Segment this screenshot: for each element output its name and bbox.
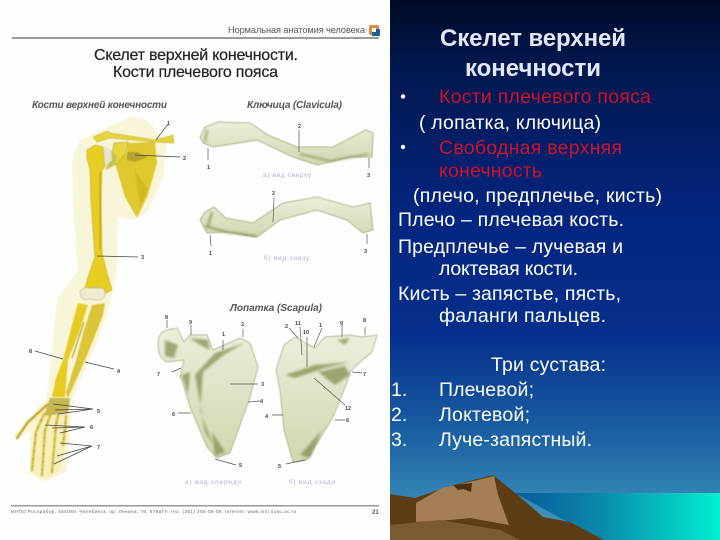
illustration: arm skeleton: 5 <box>97 409 100 415</box>
text: three joints <box>391 354 606 451</box>
illustration: clavicle, top view: 2 <box>298 124 301 130</box>
illustration: scapula, back view: 2 <box>285 324 288 330</box>
text: three joints: Луче-запястный. <box>439 429 592 451</box>
text: bone definitions: Плечо – плечевая кость. <box>398 209 624 231</box>
illustration: clavicle, bottom view: 1 <box>209 251 212 257</box>
list: limb parts: конечность <box>439 160 542 182</box>
illustration: arm skeleton: 7 <box>97 445 100 451</box>
text: bone definitions: локтевая кости. <box>439 258 578 280</box>
text: three joints: Три сустава: <box>491 354 606 376</box>
elbow joint <box>80 288 105 300</box>
page footer <box>11 505 379 516</box>
text: three joints: 3. <box>391 429 407 451</box>
illustration: scapula, back view: 8 <box>363 318 366 324</box>
illustration: clavicle, top view: 1 <box>207 165 210 171</box>
list: limb parts: Кости плечевого пояса <box>439 86 651 108</box>
illustration: scapula, back view: 10 <box>303 330 309 336</box>
list: limb parts: ( лопатка, ключица) <box>419 112 601 134</box>
caption: front view: а) вид спереди <box>185 479 241 486</box>
illustration: scapula, front view: 3 <box>261 382 264 388</box>
slide title: Скелет верхней <box>440 25 626 52</box>
atlas title <box>94 47 298 81</box>
list: limb parts <box>401 86 662 207</box>
illustration: scapula, back view: 7 <box>363 372 366 378</box>
illustration: scapula, back view: 4 <box>265 414 269 420</box>
illustration: arm skeleton: 8 <box>29 349 32 355</box>
illustration: arm skeleton <box>14 117 186 482</box>
text: bone definitions: фаланги пальцев. <box>439 305 606 327</box>
illustration: arm skeleton: 6 <box>90 425 93 431</box>
heading: upper limb bones: Кости верхней конечности <box>32 100 167 111</box>
ulna <box>66 303 105 398</box>
sea <box>515 493 720 540</box>
atlas title: Скелет верхней конечности. <box>94 47 298 64</box>
text: three joints: Локтевой; <box>439 404 530 426</box>
arm labels and leaders <box>35 124 180 464</box>
wrist and hand <box>15 398 70 478</box>
illustration: clavicle, bottom view: 3 <box>364 249 367 255</box>
illustration: clavicle, bottom view <box>200 191 373 262</box>
illustration: arm skeleton: 3 <box>141 255 144 261</box>
caption: back view: б) вид сзади <box>289 478 335 486</box>
page footer: ИНПО Росприбор, 454080, Челябинск, пр. Ленина, 76, К76аГУ, тел. (351) 265-09-09, Internet: www.onit.susu.ac.ru <box>11 509 296 514</box>
heading: clavicle: Ключица (Clavicula) <box>247 100 343 111</box>
panel: text slide <box>390 0 720 540</box>
humerus <box>85 145 112 293</box>
page footer: 21 <box>372 510 379 516</box>
text: three joints: Плечевой; <box>439 379 534 401</box>
mountain <box>390 475 604 540</box>
panel: atlas page <box>0 0 390 540</box>
illustration: scapula, back view: 9 <box>340 321 343 327</box>
scapula bone, yellow <box>115 142 157 218</box>
list: limb parts: (плечо, предплечье, кисть) <box>413 185 662 207</box>
atlas title: Кости плечевого пояса <box>113 64 278 81</box>
illustration: scapula, front view: 5 <box>239 463 242 469</box>
slide title <box>440 25 626 82</box>
illustration: scapula, back view: 11 <box>295 321 301 327</box>
slide title: конечности <box>465 55 601 82</box>
illustration: clavicle, top view: 3 <box>367 173 370 179</box>
radius <box>52 303 88 397</box>
text: bone definitions: Предплечье – лучевая и <box>398 236 623 258</box>
heading: scapula: Лопатка (Scapula) <box>229 303 323 314</box>
illustration: arm skeleton: 4 <box>117 369 121 375</box>
illustration: scapula, back view: 6 <box>346 418 349 424</box>
caption: top view: а) вид сверху <box>263 172 312 179</box>
illustration: arm skeleton: 1 <box>167 121 170 127</box>
illustration: scapula, front view: 6 <box>172 412 175 418</box>
illustration: arm skeleton: 2 <box>183 156 186 162</box>
text: bone definitions <box>398 209 624 327</box>
illustration: scapula, front view <box>157 315 264 486</box>
illustration: scapula, back view <box>265 318 377 486</box>
page header: Нормальная анатомия человека <box>228 25 366 35</box>
illustration: scapula, front view: 4 <box>260 399 264 405</box>
illustration: scapula, front view: 8 <box>165 315 168 321</box>
text: bone definitions: Кисть – запястье, пясть, <box>398 283 621 305</box>
illustration: scapula, back view: 1 <box>319 323 322 329</box>
illustration: scapula, front view: 9 <box>189 320 192 326</box>
humeral head <box>103 145 113 168</box>
illustration: clavicle, top view <box>200 122 373 179</box>
illustration: scapula, front view: 1 <box>222 332 225 338</box>
illustration: clavicle, bottom view: 2 <box>272 191 275 197</box>
illustration: scapula, front view: 7 <box>157 372 160 378</box>
clavicle bone, yellow <box>93 131 174 143</box>
illustration: scapula, back view: 5 <box>278 464 281 470</box>
page header <box>12 25 380 39</box>
illustration: scapula, front view: 2 <box>241 322 244 328</box>
text: three joints: 2. <box>391 404 407 426</box>
list: limb parts: Свободная верхняя <box>439 137 622 159</box>
caption: bottom view: б) вид снизу <box>264 254 310 262</box>
text: three joints: 1. <box>391 379 407 401</box>
illustration: scapula, back view: 12 <box>345 406 351 412</box>
